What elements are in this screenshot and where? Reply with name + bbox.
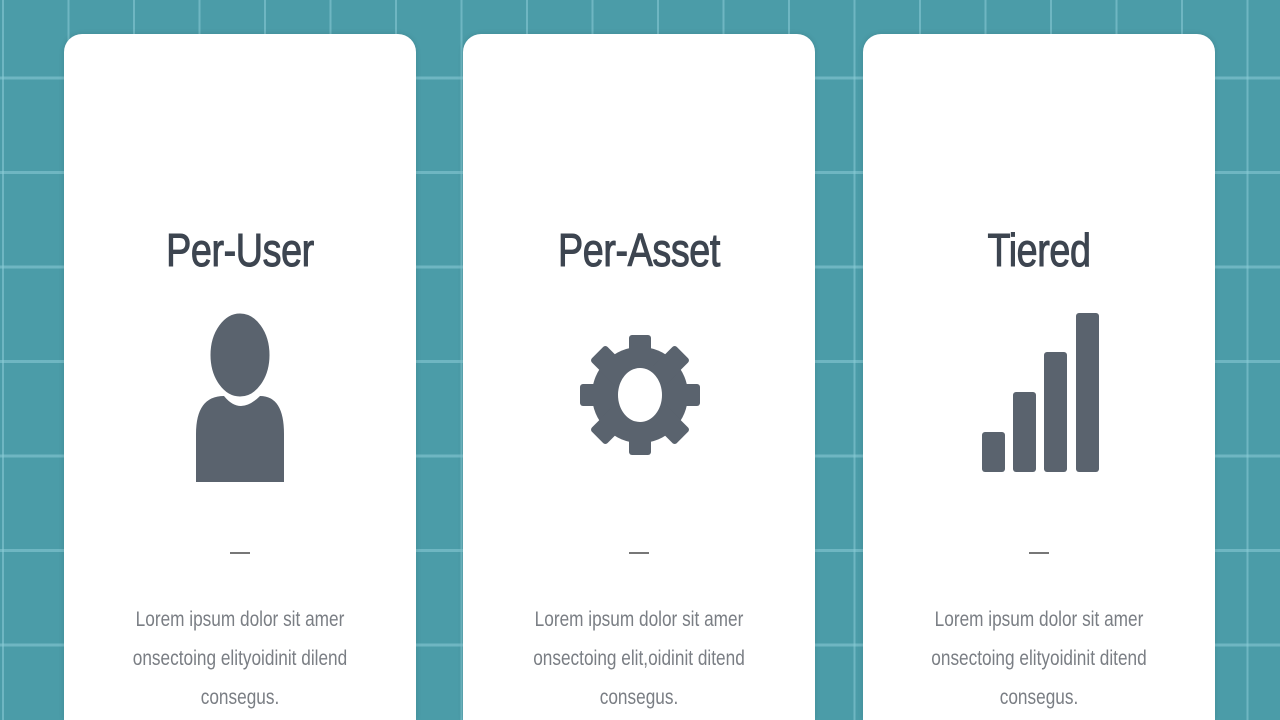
- icon: gear: [580, 335, 700, 455]
- panel: per-asset: [463, 34, 815, 720]
- panel: tiered: [863, 34, 1215, 720]
- text block: onsectoing elityoidinit dilend: [133, 647, 347, 670]
- divider dash: [629, 552, 649, 554]
- heading: Per-Asset: Per-Asset: [558, 224, 720, 276]
- text block: onsectoing elit,oidinit ditend: [533, 647, 745, 670]
- text block: [133, 608, 347, 709]
- text block: Lorem ipsum dolor sit amer: [935, 608, 1143, 631]
- icon: person: [196, 314, 284, 482]
- text block: [533, 608, 745, 709]
- heading: Tiered: Tiered: [987, 224, 1091, 276]
- heading: Per-User: Per-User: [166, 224, 314, 276]
- text block: Lorem ipsum dolor sit amer: [136, 608, 344, 631]
- text block: consegus.: [600, 686, 678, 709]
- text block: consegus.: [201, 686, 279, 709]
- divider dash: [230, 552, 250, 554]
- text block: Lorem ipsum dolor sit amer: [535, 608, 743, 631]
- text block: [931, 608, 1147, 709]
- panel: per-user: [64, 34, 416, 720]
- divider dash: [1029, 552, 1049, 554]
- text block: consegus.: [1000, 686, 1078, 709]
- text block: onsectoing elityoidinit ditend: [931, 647, 1147, 670]
- icon: bar chart: [982, 313, 1099, 472]
